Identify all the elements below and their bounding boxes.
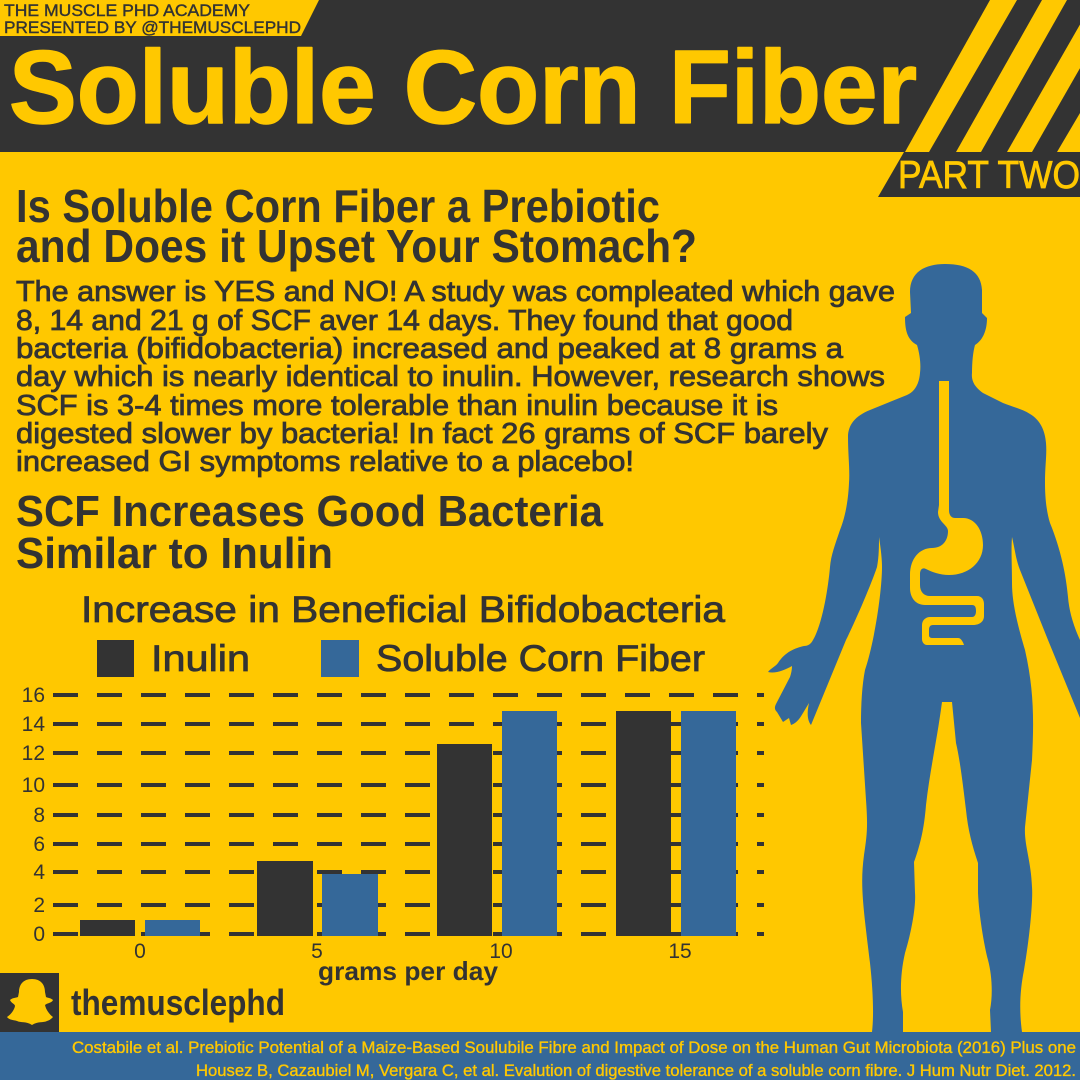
body text: increased GI symptoms relative to a placebo! — [16, 446, 634, 478]
footer citation bar — [0, 1032, 1080, 1080]
y axis labels: 10 — [22, 774, 45, 797]
chart legend: Inulin — [151, 638, 250, 679]
x axis labels — [134, 940, 692, 963]
bars: soluble corn fiber — [145, 711, 736, 936]
second heading — [16, 487, 603, 578]
main heading: and Does it Upset Your Stomach? — [16, 220, 697, 272]
bar chart — [22, 684, 764, 986]
second heading: SCF Increases Good Bacteria — [16, 487, 603, 536]
x axis labels: 10 — [489, 940, 513, 963]
x axis labels: 0 — [134, 940, 146, 963]
chart legend: Soluble Corn Fiber — [376, 638, 705, 679]
bars: inulin — [80, 711, 671, 936]
y axis labels: 0 — [33, 923, 45, 946]
header banner — [0, 0, 1080, 152]
y axis labels: 16 — [22, 684, 45, 707]
digestive tract icon — [910, 381, 984, 645]
hazard stripes — [905, 0, 1080, 152]
academy tag: PRESENTED BY @THEMUSCLEPHD — [4, 18, 301, 37]
body text: day which is nearly identical to inulin. However, research shows — [16, 361, 885, 393]
y axis labels: 2 — [33, 894, 45, 917]
footer citation bar: Costabile et al. Prebiotic Potential of a Maize-Based Soulubile Fibre and Impact of Dose on the Human Gut Microbiota (2016) Plus one — [72, 1038, 1076, 1057]
title: Soluble Corn Fiber — [9, 30, 917, 146]
body text: digested slower by bacteria! In fact 26 grams of SCF barely — [16, 418, 829, 450]
body text: 8, 14 and 21 g of SCF aver 14 days. They found that good — [16, 305, 793, 337]
icon: snapchat ghost — [7, 979, 53, 1025]
y axis labels: 4 — [33, 861, 45, 884]
body text: The answer is YES and NO! A study was compleated which gave — [16, 276, 895, 308]
academy tag — [0, 0, 319, 37]
y axis labels: 8 — [33, 804, 45, 827]
y axis labels: 14 — [22, 713, 45, 736]
academy tag: THE MUSCLE PHD ACADEMY — [4, 1, 250, 20]
y axis labels: 6 — [33, 833, 45, 856]
footer citation bar: Housez B, Cazaubiel M, Vergara C, et al. Evalution of digestive tolerance of a soluble corn fibre. J Hum Nutr Diet. 2012. — [196, 1061, 1076, 1080]
snapchat handle: themusclephd — [71, 982, 285, 1023]
x axis labels: 5 — [311, 940, 323, 963]
y axis labels — [22, 684, 45, 946]
main heading: Is Soluble Corn Fiber a Prebiotic — [16, 180, 660, 232]
x axis title: grams per day — [318, 956, 499, 986]
human body silhouette — [768, 264, 1080, 1032]
body text: SCF is 3-4 times more tolerable than inulin because it is — [16, 390, 778, 422]
main heading — [16, 180, 697, 272]
x axis labels: 15 — [668, 940, 692, 963]
chart title: Increase in Beneficial Bifidobacteria — [81, 589, 725, 630]
body text: bacteria (bifidobacteria) increased and peaked at 8 grams a — [16, 333, 844, 365]
snapchat badge — [0, 973, 285, 1032]
y axis labels: 12 — [22, 742, 45, 765]
second heading: Similar to Inulin — [16, 529, 333, 578]
body text — [16, 276, 895, 478]
chart legend — [97, 638, 705, 679]
